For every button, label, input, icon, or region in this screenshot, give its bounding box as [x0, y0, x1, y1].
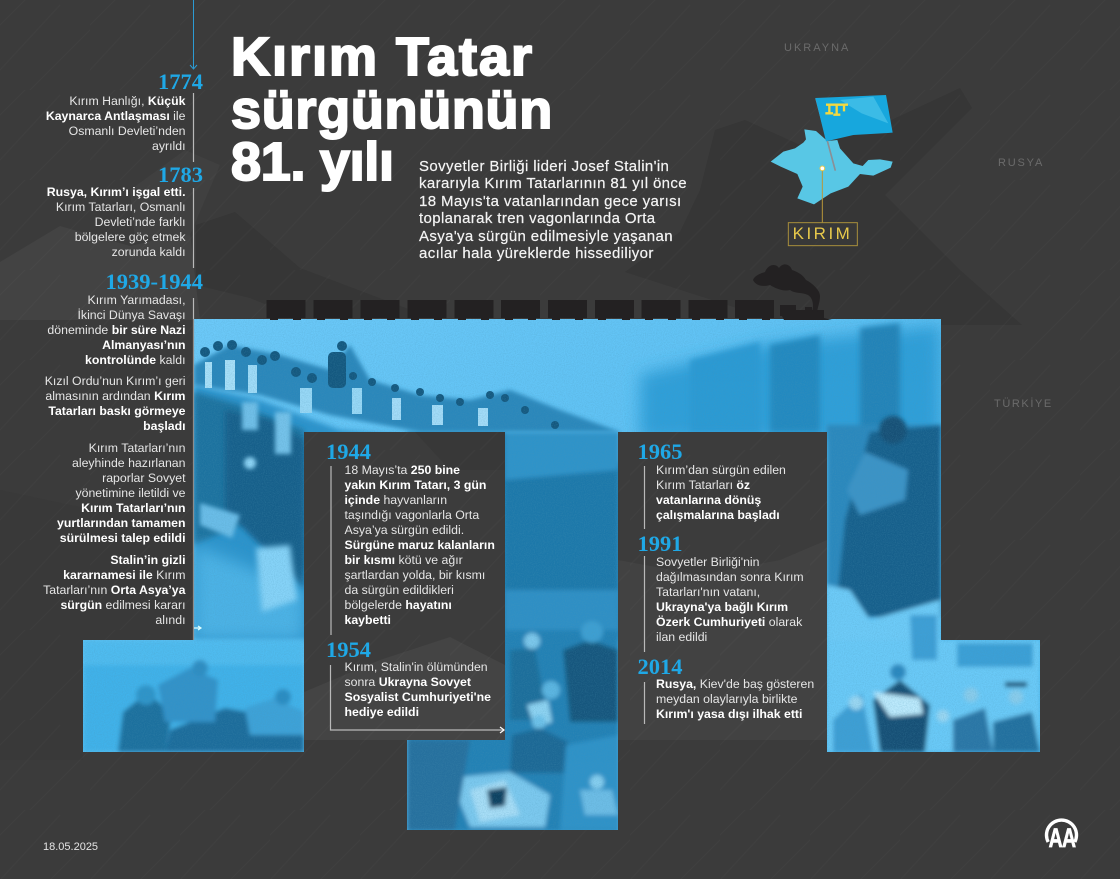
- map shade inside panels: [304, 432, 827, 740]
- text 1939-1944 part four: sürgün edilmesi kararı: [60, 598, 186, 612]
- title: Kırım Tatar: [231, 27, 534, 87]
- left wagon and lower scene: [194, 385, 660, 640]
- text 1783: zorunda kaldı: [112, 245, 186, 259]
- text 1939-1944 part three: raporlar Sovyet: [102, 471, 186, 485]
- intro paragraph: 18 Mayıs'ta vatanlarından gece yarısı: [419, 193, 682, 210]
- text 1774: Osmanlı Devleti’nden: [69, 124, 186, 138]
- intro paragraph: acılar hala yüreklerde hissediliyor: [419, 245, 654, 262]
- text 1939-1944 part four: Tatarları’nın Orta Asya’ya: [43, 583, 186, 597]
- flag pole: [816, 98, 835, 171]
- text 1944: Sürgüne maruz kalanların: [344, 538, 495, 552]
- text 1939-1944 part two: [45, 374, 186, 433]
- text 1939-1944 part three: yurtlarından tamamen: [57, 516, 186, 530]
- country label: Ukrayna: UKRAYNA: [784, 42, 850, 54]
- text 1991: Ukrayna'ya bağlı Kırım: [656, 600, 788, 614]
- text 1939-1944 part two: Kızıl Ordu’nun Kırım’ı geri: [45, 374, 186, 388]
- intro paragraph: Asya'ya sürgün edilmesiyle yaşanan: [419, 228, 673, 245]
- right freight wagons: [640, 323, 941, 440]
- bottom-centre seated family: [407, 432, 619, 832]
- text 1783: bölgelere göç etmek: [75, 230, 186, 244]
- text 1939-1944 part one: [47, 292, 186, 367]
- text 1944: [344, 462, 495, 627]
- text 1965: Kırım’dan sürgün edilen: [656, 462, 786, 476]
- text 1965: vatanlarına dönüş: [656, 493, 761, 507]
- text 1965: Kırım Tatarları öz: [656, 478, 750, 492]
- text 1954: sonra Ukrayna Sovyet: [344, 675, 471, 689]
- text 1944: kaybetti: [344, 613, 391, 627]
- text 1939-1944 part three: [57, 440, 186, 545]
- text 1944: yakın Kırım Tatarı, 3 gün: [344, 478, 486, 492]
- text 1991: Tatarları'nın vatanı,: [656, 585, 760, 599]
- sky: [80, 319, 1050, 839]
- flag: [815, 95, 893, 141]
- title: sürgününün: [231, 80, 553, 140]
- photo grain: [83, 319, 1040, 830]
- text 1939-1944 part four: [43, 552, 186, 627]
- AA logo arc: [1046, 820, 1076, 842]
- intro paragraph: [418, 158, 687, 262]
- text 1939-1944 part three: yönetimine iletildi ve: [75, 486, 186, 500]
- text 1954: Sosyalist Cumhuriyeti'ne: [344, 690, 491, 704]
- text 1939-1944 part one: İkinci Dünya Savaşı: [78, 308, 186, 322]
- tamga emblem: [825, 105, 848, 115]
- text 1991: ilan edildi: [656, 630, 707, 644]
- text 2014: Rusya, Kiev'de baş gösteren: [656, 677, 814, 691]
- map label: Kırım: KIRIM: [793, 224, 852, 243]
- year 1774: 1774: [158, 69, 203, 94]
- marker dot: [820, 166, 825, 171]
- year 1965: 1965: [638, 439, 682, 464]
- text 1944: 18 Mayıs’ta 250 bine: [344, 462, 460, 476]
- text 1991: Sovyetler Birliği'nin: [656, 554, 760, 568]
- timeline rules: left column: [194, 93, 201, 640]
- intro paragraph: Sovyetler Birliği lideri Josef Stalin'in: [419, 158, 669, 175]
- text 1939-1944 part three: Kırım Tatarları’nın: [81, 501, 186, 515]
- title: [231, 27, 553, 192]
- title: 81. yılı: [231, 132, 394, 192]
- text 1944: Asya’ya sürgün edildi.: [344, 523, 464, 537]
- text 1939-1944 part three: Kırım Tatarları’nın: [89, 440, 186, 454]
- text 1939-1944 part two: Tatarları baskı görmeye: [48, 404, 186, 418]
- text 1783: [47, 185, 186, 259]
- year 1944: 1944: [326, 439, 371, 464]
- panel: right timeline card: [618, 432, 827, 740]
- text 2014: [656, 677, 814, 721]
- text 1944: da sürgün edildikleri: [344, 583, 454, 597]
- text 1939-1944 part three: aleyhinde hazırlanan: [72, 456, 186, 470]
- text 1991: dağılmasından sonra Kırım: [656, 570, 804, 584]
- intro paragraph: kararıyla Kırım Tatarlarının 81 yıl önce: [419, 175, 687, 192]
- text 1944: şartlardan yolda, bir kısmı: [344, 568, 485, 582]
- text 2014: Kırım'ı yasa dışı ilhak etti: [656, 707, 802, 721]
- text 1774: [46, 94, 186, 153]
- text 1939-1944 part four: alındı: [155, 613, 186, 627]
- right column embrace and group portrait: [827, 416, 1040, 752]
- text 1939-1944 part one: Almanyası’nın: [102, 338, 186, 352]
- text 1991: Özerk Cumhuriyeti olarak: [656, 615, 802, 629]
- text 1944: taşındığı vagonlarla Orta: [344, 508, 479, 522]
- crowd on the train roof: [194, 340, 620, 432]
- label box: [788, 223, 857, 246]
- locomotive: [780, 305, 832, 320]
- year 1954: 1954: [326, 636, 371, 662]
- timeline arrow from top: [190, 0, 197, 69]
- text 1939-1944 part three: sürülmesi talep edildi: [60, 531, 186, 545]
- text 1965: çalışmalarına başladı: [656, 508, 780, 522]
- wagons: [266, 300, 774, 320]
- text 1991: [656, 554, 804, 644]
- text 1774: Kırım Hanlığı, Küçük: [69, 94, 186, 108]
- Crimea map with flag and label: [771, 95, 893, 246]
- panel: left timeline card: [304, 432, 505, 740]
- text 1939-1944 part one: kontrolünde kaldı: [85, 353, 186, 367]
- text 1954: hediye edildi: [344, 705, 419, 719]
- text 1774: Kaynarca Antlaşması ile: [46, 109, 186, 123]
- AA logo letters: AA: [1049, 823, 1075, 853]
- marker line: [821, 170, 824, 223]
- text 1939-1944 part two: başladı: [143, 419, 186, 433]
- train silhouette: [266, 264, 832, 320]
- text 1965: [656, 462, 786, 522]
- year 1939-1944: 1939-1944: [106, 269, 203, 294]
- text 1783: Kırım Tatarları, Osmanlı: [56, 200, 186, 214]
- text 1783: Rusya, Kırım’ı işgal etti.: [47, 185, 186, 199]
- year 1783: 1783: [158, 162, 203, 186]
- text 1939-1944 part one: döneminde bir süre Nazi: [47, 323, 186, 337]
- date: 18.05.2025: [43, 841, 98, 853]
- timeline rules: right card: [644, 466, 646, 724]
- Crimea shape: [771, 129, 893, 204]
- text 1954: [344, 660, 491, 719]
- text 1944: bölgelerde hayatını: [344, 598, 452, 612]
- lower left figures: [83, 640, 304, 752]
- text 1939-1944 part one: Kırım Yarımadası,: [88, 292, 186, 306]
- text 1939-1944 part four: Stalin’in gizli: [110, 552, 186, 566]
- smoke: [753, 264, 820, 312]
- country label: Türkiye: TÜRKİYE: [994, 398, 1053, 410]
- country label: Rusya: RUSYA: [998, 157, 1044, 169]
- text 1774: ayrıldı: [152, 139, 186, 153]
- text 1939-1944 part four: kararnamesi ile Kırım: [63, 568, 186, 582]
- text 1939-1944 part two: almasının ardından Kırım: [45, 389, 186, 403]
- text 1944: bir kısmı kötü ve ağır: [344, 553, 463, 567]
- year 1991: 1991: [638, 531, 682, 556]
- text 1944: içinde hayvanların: [344, 493, 447, 507]
- text 1783: Devleti’nde farklı: [95, 215, 186, 229]
- text 2014: meydan olaylarıyla birlikte: [656, 692, 797, 706]
- text 1954: Kırım, Stalin'in ölümünden: [344, 660, 488, 674]
- year 2014: 2014: [638, 654, 682, 679]
- intro paragraph: toplanarak tren vagonlarında Orta: [419, 210, 656, 227]
- photo collage in blue duotone: [80, 319, 1050, 839]
- timeline rules: left card with arrow: [330, 466, 504, 733]
